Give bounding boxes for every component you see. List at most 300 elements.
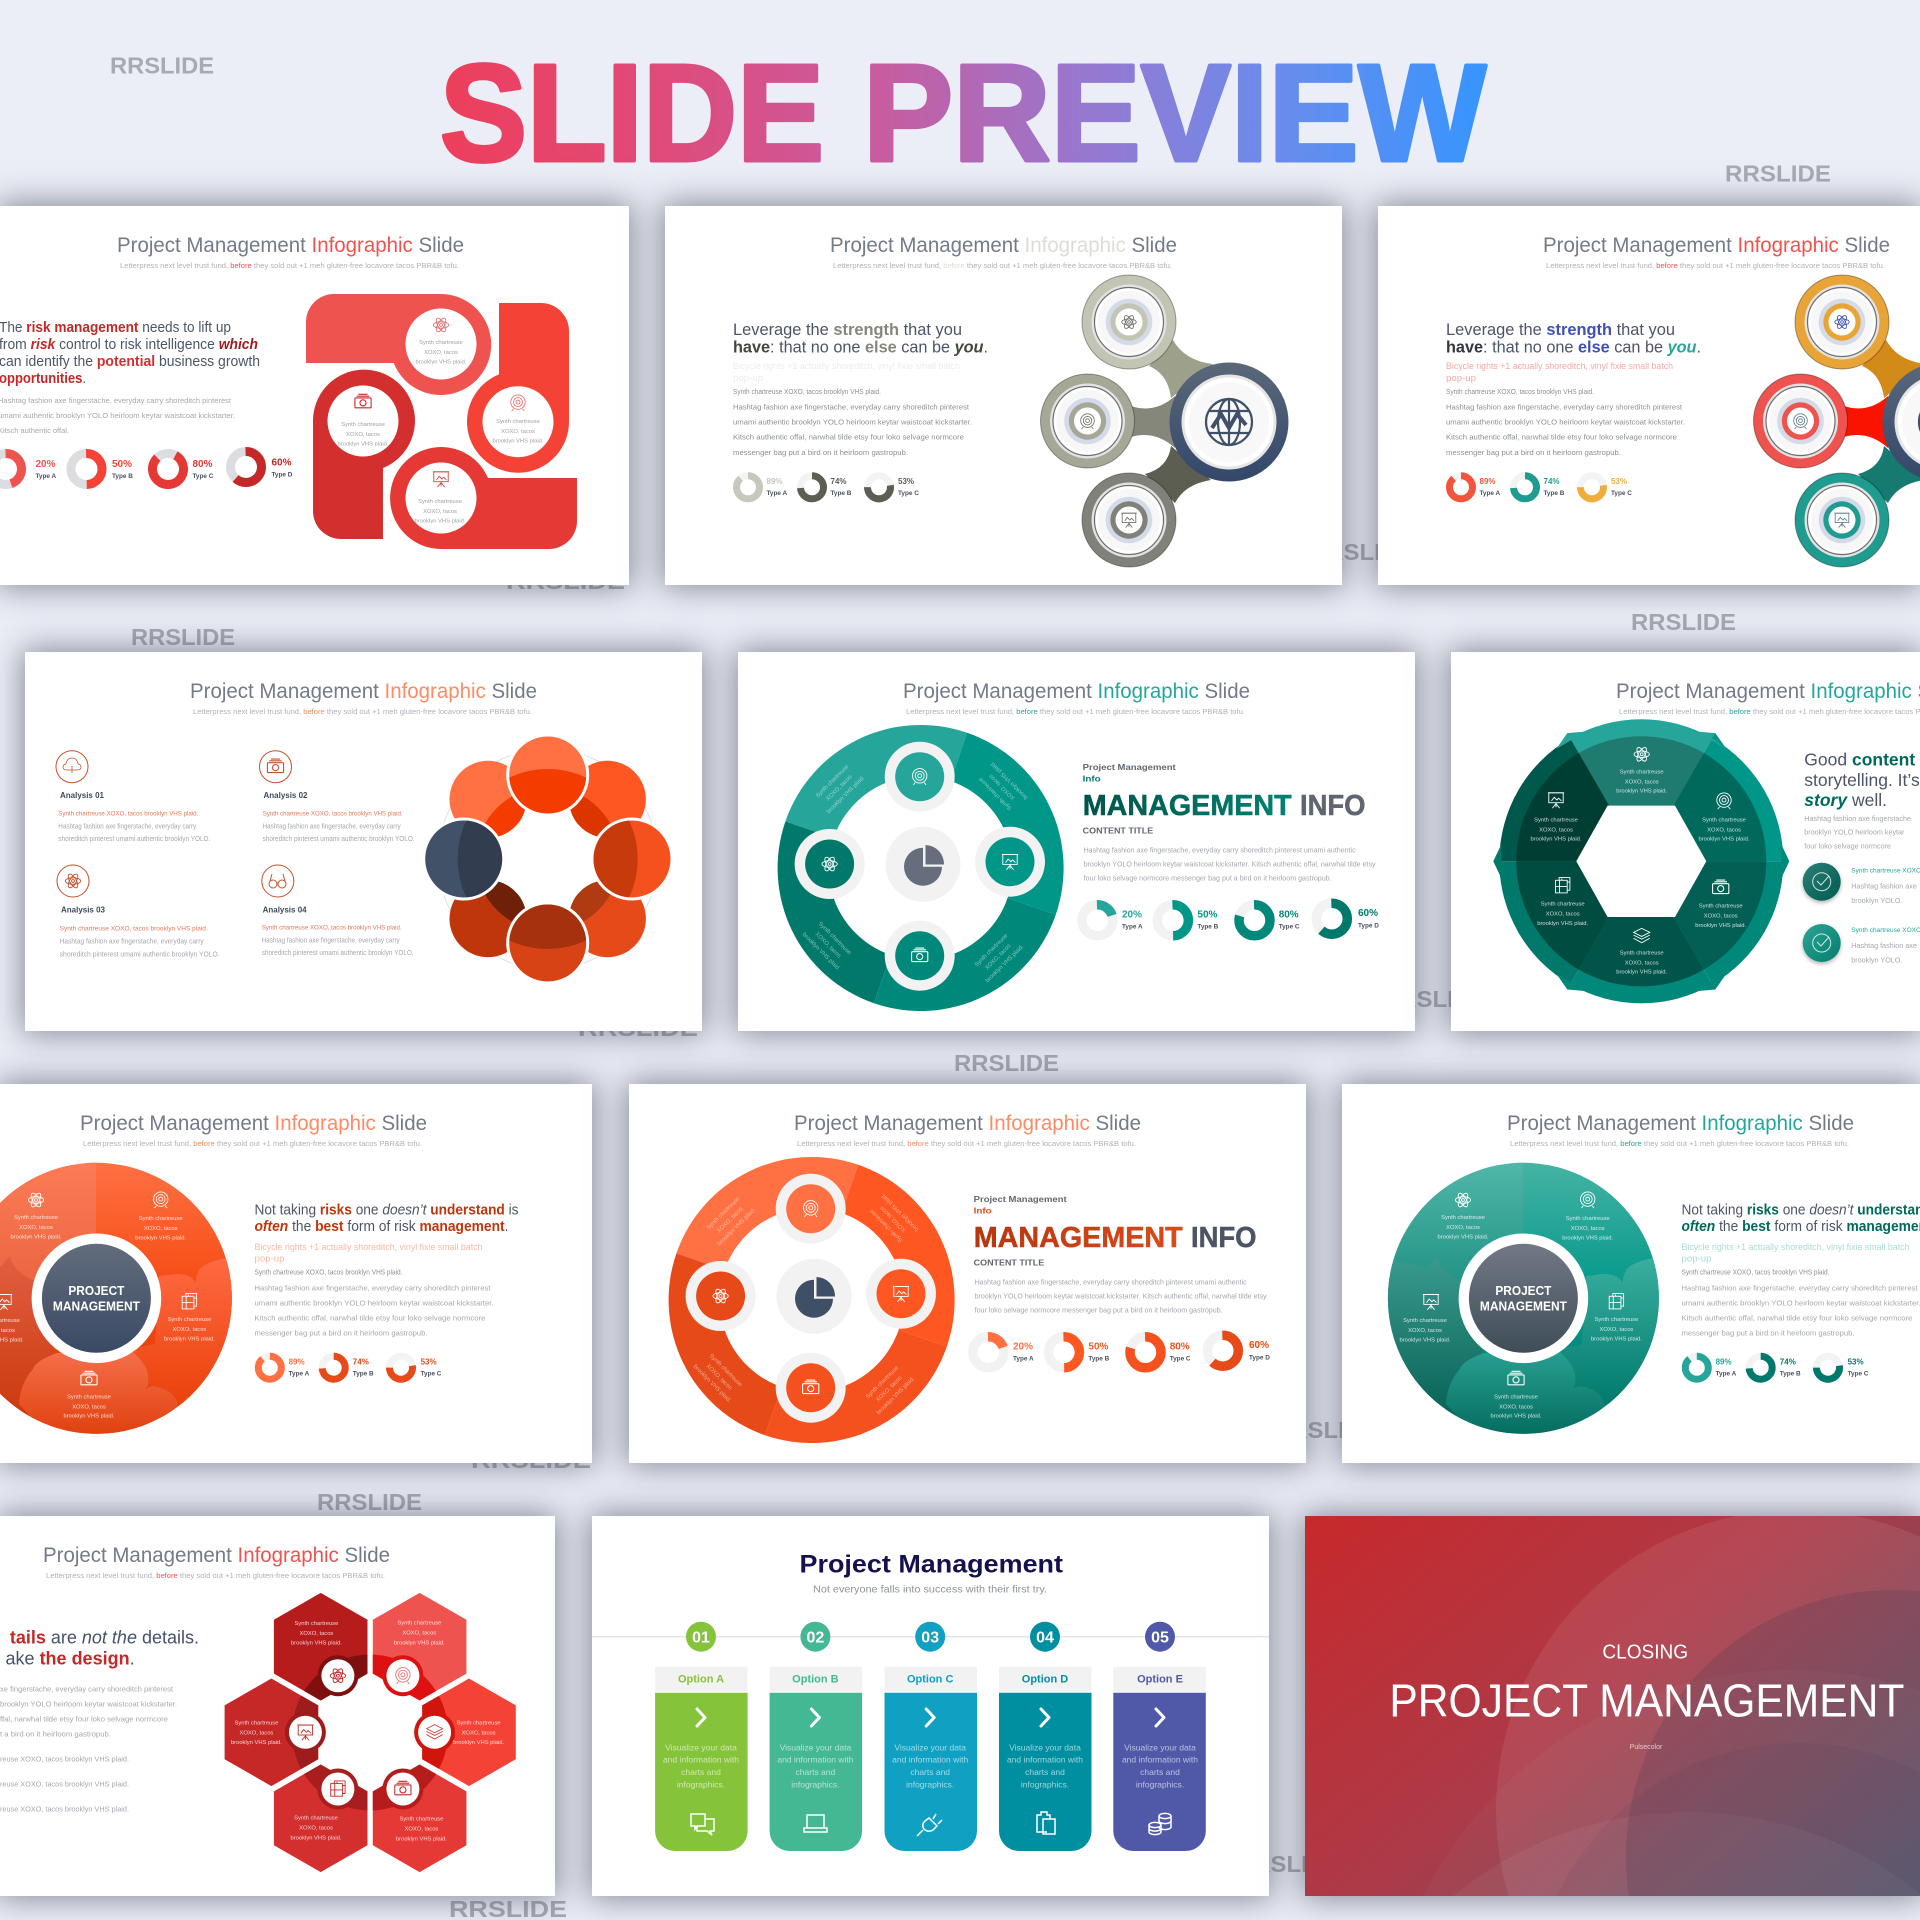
title: SLIDE [440,36,824,190]
option C column: 03 [921,1630,939,1646]
body text: messenger bag put a bird on it heirloom gastropub. [733,450,908,457]
donut labels [1480,477,1632,497]
body text: Hashtag fashion axe fingerstache, everyday carry shoreditch pinterest [733,404,969,412]
diagram: teal wheel: Synth chartreuse [1441,1215,1485,1221]
diagram: orange wheel: Synth chartreuse [67,1394,111,1400]
headline text [0,319,260,387]
title: PREVIEW [863,36,1487,190]
diagram: ring with four nodes: brooklyn VHS plaid. [826,775,866,815]
pale subtext [733,361,960,383]
pale subtext [1446,361,1673,383]
watermark: RRSLIDE [578,1015,698,1041]
option B column: and information with [777,1755,854,1765]
watermark: RRSLIDE [1382,986,1487,1012]
info heading block [974,1195,1256,1267]
body text: brooklyn YOLO heirloom keytar waistcoat kickstarter. Kitsch authentic offal, narwhal tilde etsy [975,1292,1267,1301]
donut labels: 60% [1358,908,1378,919]
diagram: hexagon ring: brooklyn VHS plaid. [1531,837,1582,843]
check item two: Synth chartreuse XOXO [1851,927,1920,934]
option E column [1113,1622,1206,1851]
diagram: four interlocking shapes: Synth chartreuse [418,499,462,505]
body text: reuse XOXO, tacos brooklyn VHS plaid. [0,1755,129,1764]
diagram: six hexagons: brooklyn VHS plaid. [394,1640,445,1646]
subheading: Letterpress next level trust fund, before they sold out +1 meh gluten-free locavore tacos PBR&B tofu. [1546,261,1885,270]
diagram: teal wheel: brooklyn VHS plaid. [1491,1414,1542,1420]
option B column: Option B [792,1673,839,1685]
donut labels: Type D [1358,922,1379,929]
diagram: six hexagons: XOXO, tacos [404,1827,438,1833]
option E column: charts and [1140,1767,1180,1777]
panel: five options slide [592,1516,1269,1896]
watermark: RRSLIDE [110,52,214,78]
body text: Synth chartreuse XOXO, tacos brooklyn VHS plaid. [733,389,881,396]
diagram: teal wheel: PROJECT [1495,1284,1552,1298]
diagram: ring with four nodes: XOXO, tacos [814,931,842,960]
diagram: hexagon ring: XOXO, tacos [1546,911,1580,917]
block: analysis 02: Analysis 02 [264,791,308,800]
option C column: charts and [910,1767,950,1777]
diagram: teal wheel: XOXO, tacos [1446,1225,1480,1231]
donut labels: Type B [112,473,133,480]
donut charts [258,1354,414,1381]
check item two [1803,924,1920,965]
headline text [1804,750,1920,810]
diagram: circle flower [424,735,672,983]
body text: t a bird on it heirloom gastropub. [0,1730,111,1739]
donut labels: Type A [766,490,787,497]
headline text [733,321,988,356]
donut labels: Type C [1611,490,1632,497]
body text: umami authentic brooklyn YOLO heirloom keytar waistcoat kickstarter. [254,1298,494,1307]
donut labels: 89% [1480,477,1496,486]
pale subtext: Bicycle rights +1 actually shoreditch, vinyl fixie small batch [733,361,960,371]
diagram: orange wheel: brooklyn VHS plaid. [135,1235,187,1241]
option A column: and information with [663,1755,739,1765]
option B column: charts and [796,1767,836,1777]
donut charts [1082,903,1347,936]
panel: hexagon details slide [0,1516,555,1896]
body text: messenger bag put a bird on it heirloom gastropub. [1446,450,1621,457]
info heading block: Project Management [974,1195,1067,1204]
subheading: Letterpress next level trust fund, before they sold out +1 meh gluten-free locavore tacos PBR&B tofu. [833,261,1172,270]
diagram: hexagon ring: brooklyn VHS plaid. [1616,970,1668,976]
diagram: ring with four nodes: Synth chartreuse [974,933,1009,968]
diagram: ring with four nodes: XOXO, tacos [825,774,854,802]
block: analysis 02: Hashtag fashion axe fingerstache, everyday carry [263,822,401,831]
body text: Hashtag fashion axe fingerstache, everyday carry shoreditch pinterest umami authentic [1084,846,1356,855]
panel: orange ring management info slide [629,1084,1306,1463]
body text: Hashtag fashion axe fingerstache, everyday carry shoreditch pinterest [0,396,231,405]
donut labels: Type A [289,1371,310,1378]
diagram: ring with four nodes: brooklyn VHS plaid. [692,1364,732,1404]
headline text: have: that no one else can be you. [1446,338,1701,356]
pale subtext: Bicycle rights +1 actually shoreditch, vinyl fixie small batch [1446,361,1673,371]
donut labels: 89% [289,1358,305,1367]
donut labels: Type A [1716,1371,1737,1378]
donut labels: 20% [1013,1341,1033,1352]
block: analysis 03: Analysis 03 [61,905,106,914]
diagram: six hexagons: XOXO, tacos [299,1631,333,1637]
body text [1084,846,1376,883]
diagram: orange wheel: Synth chartreuse [139,1216,183,1222]
block: analysis 03 [57,865,220,958]
headline text: tails are not the details. [10,1627,199,1647]
diagram: orange wheel: XOXO, tacos [72,1404,106,1410]
option A column: 01 [692,1630,710,1646]
body text: reuse XOXO, tacos brooklyn VHS plaid. [0,1780,129,1789]
block: analysis 04 [262,865,414,957]
panel: hexagon ring content slide [1451,652,1920,1031]
diagram: ring with four nodes: Synth chartreuse [706,1196,741,1231]
heading: Project Management Infographic Slide [117,234,464,257]
donut labels: 50% [1088,1341,1109,1352]
body text: reuse XOXO, tacos brooklyn VHS plaid. [0,1805,129,1814]
subheading: Not everyone falls into success with their first try. [813,1584,1047,1595]
donut charts [0,448,262,490]
info heading block: Info [1083,774,1101,783]
donut labels: 20% [36,459,56,470]
diagram: teal wheel: brooklyn VHS plaid. [1438,1234,1489,1240]
watermark: RRSLIDE [1236,1851,1341,1877]
diagram: four interlocking shapes: brooklyn VHS plaid. [416,360,467,366]
diagram: hexagon ring: brooklyn VHS plaid. [1616,789,1668,795]
donut labels: Type A [1013,1356,1034,1363]
info heading block [1083,763,1366,835]
headline text: ake the design. [6,1648,135,1668]
pale subtext: pop-up [254,1254,284,1264]
option A column [655,1622,748,1851]
watermark: RRSLIDE [1725,160,1831,186]
panel: analysis flower slide [25,652,702,1031]
diagram: orange wheel: MANAGEMENT [53,1300,140,1314]
donut labels [766,477,919,497]
option B column: Visualize your data [780,1743,852,1753]
donut labels: Type C [1170,1356,1191,1363]
donut labels: 53% [421,1358,437,1367]
body text: Kitsch authentic offal, narwhal tilde etsy four loko selvage normcore [1682,1314,1912,1323]
diagram: four interlocking shapes: brooklyn VHS plaid. [338,442,389,448]
body text: messenger bag put a bird on it heirloom gastropub. [254,1329,428,1338]
donut charts [1450,474,1605,501]
body text: umami authentic brooklyn YOLO heirloom keytar waistcoat kickstarter. [1446,420,1685,426]
diagram: hexagon ring: XOXO, tacos [1707,827,1741,833]
donut labels: Type B [1197,924,1219,931]
body text: four loko selvage normcore messenger bag put a bird on it heirloom gastropub. [975,1306,1223,1315]
info heading block: CONTENT TITLE [1083,825,1154,835]
heading: Project Management Infographic Slide [794,1112,1141,1135]
body text: brooklyn YOLO heirloom keytar waistcoat kickstarter. [0,1700,177,1709]
info heading block: Project Management [1083,763,1176,772]
diagram: teal wheel: Synth chartreuse [1594,1317,1638,1323]
body text [1682,1269,1920,1338]
diagram: hexagon ring: Synth chartreuse [1620,950,1664,956]
diagram: spinner [1040,275,1288,567]
donut labels: 74% [1780,1358,1796,1367]
closing subtitle: Pulsecolor [1630,1744,1663,1751]
donut labels: Type A [1480,490,1500,497]
diagram: hexagon ring [1493,719,1789,1003]
diagram: ring with four nodes: Synth chartreuse [815,764,850,799]
diagram: orange wheel: Synth chartreuse [14,1215,58,1221]
diagram: four interlocking shapes: XOXO, tacos [346,432,380,438]
body text: messenger bag put a bird on it heirloom gastropub. [1682,1329,1854,1338]
option A column: charts and [681,1767,721,1777]
headline text: Not taking risks one doesn’t understand is [254,1201,518,1218]
donut labels: 74% [353,1358,369,1367]
watermark: RRSLIDE [954,1050,1059,1076]
option C column: Option C [907,1673,953,1685]
block: analysis 01: Analysis 01 [60,791,105,800]
pale subtext: pop-up [733,373,763,383]
diagram: ring with four nodes [778,725,1064,1011]
diagram: hexagon ring: Synth chartreuse [1702,817,1746,823]
block: analysis 03: Hashtag fashion axe fingerstache, everyday carry [60,936,204,945]
headline text [6,1627,199,1668]
body text [733,389,972,457]
watermark: RRSLIDE [1309,539,1414,565]
diagram: orange wheel: brooklyn VHS plaid. [11,1234,62,1240]
diagram: six hexagons: brooklyn VHS plaid. [291,1835,342,1841]
body text: Kitsch authentic offal, narwhal tilde etsy four loko selvage normcore [1446,434,1677,442]
block: analysis 01: shoreditch pinterest umami authentic brooklyn YOLO. [58,834,210,843]
option A column: infographics. [677,1779,725,1789]
block: analysis 03: Synth chartreuse XOXO, tacos brooklyn VHS plaid. [60,925,208,932]
background gradient and circles [1305,1510,1920,1920]
diagram: orange wheel: PROJECT [68,1284,125,1298]
diagram: four interlocking shapes: brooklyn VHS plaid. [493,438,544,444]
donut labels: 60% [1249,1340,1269,1351]
info heading block: MANAGEMENT [974,1222,1183,1254]
donut labels: 53% [1611,477,1627,486]
donut labels: 89% [766,477,783,486]
diagram: four interlocking shapes: Synth chartreuse [496,419,540,425]
diagram: six hexagons: Synth chartreuse [234,1720,278,1726]
diagram: spinner [1754,275,1920,567]
donut labels: Type C [898,490,919,497]
diagram: hexagon ring: XOXO, tacos [1625,779,1659,785]
diagram: six hexagons: Synth chartreuse [294,1621,338,1627]
diagram: ring with four nodes: brooklyn VHS plaid. [801,932,841,972]
diagram: hexagon ring: Synth chartreuse [1541,901,1585,907]
body text: xe fingerstache, everyday carry shoreditch pinterest [0,1685,173,1694]
watermark: RRSLIDE [1631,609,1736,635]
panel: orange wheel risks slide [0,1084,592,1463]
option A column: Visualize your data [665,1743,737,1753]
option C column [884,1622,977,1851]
option D column: Option D [1022,1673,1068,1685]
option D column: charts and [1025,1767,1065,1777]
donut labels: Type B [1780,1371,1801,1378]
headline text: from risk control to risk intelligence which [0,336,258,353]
watermark: RRSLIDE [131,624,235,650]
pale subtext: Bicycle rights +1 actually shoreditch, vinyl fixie small batch [1682,1242,1910,1252]
diagram: hexagon ring: XOXO, tacos [1704,914,1738,920]
donut labels: Type B [1088,1356,1110,1363]
panel: risk management slide [0,206,629,585]
diagram: ring with four nodes: XOXO, tacos [988,772,1016,801]
pale subtext: Bicycle rights +1 actually shoreditch, vinyl fixie small batch [254,1242,482,1252]
diagram: teal wheel: XOXO, tacos [1599,1327,1633,1333]
body text: umami authentic brooklyn YOLO heirloom keytar waistcoat kickstarter. [1682,1298,1920,1307]
diagram: six hexagons: XOXO, tacos [462,1730,496,1736]
closing label: CLOSING [1602,1641,1688,1663]
body text: Synth chartreuse XOXO, tacos brooklyn VHS plaid. [1682,1269,1830,1276]
diagram: teal wheel: brooklyn VHS plaid. [1562,1235,1614,1241]
body text [1446,389,1685,457]
diagram: ring with four nodes: brooklyn VHS plaid. [717,1207,757,1247]
heading: Project Management [800,1551,1064,1579]
headline text: The risk management needs to lift up [0,319,231,336]
diagram: ring with four nodes: Synth chartreuse [708,1353,743,1388]
donut labels: 80% [192,459,213,470]
headline text [1682,1201,1920,1235]
diagram: orange wheel: brooklyn VHS plaid. [64,1414,115,1420]
pale subtext [254,1242,482,1264]
subheading: Letterpress next level trust fund, before they sold out +1 meh gluten-free locavore tacos PBR&B tofu. [1510,1139,1849,1148]
block: analysis 02: Synth chartreuse XOXO, tacos brooklyn VHS plaid. [263,811,403,818]
diagram: six hexagons: XOXO, tacos [402,1631,436,1637]
diagram: ring with four nodes: brooklyn VHS plaid. [989,760,1029,800]
donut labels: Type B [1544,490,1565,497]
donut charts [1685,1354,1841,1381]
donut charts [973,1335,1238,1368]
diagram: ring with four nodes: Synth chartreuse [817,921,852,956]
option D column: and information with [1007,1755,1083,1765]
diagram: ring with four nodes [669,1157,955,1443]
title [440,36,1487,190]
donut labels: 53% [1848,1358,1864,1367]
body text: Synth chartreuse XOXO, tacos brooklyn VHS plaid. [254,1269,403,1276]
watermark: RRSLIDE [471,1447,591,1473]
body text: Hashtag fashion axe fingerstache [1804,814,1911,823]
headline text: often the best form of risk management. [254,1218,508,1235]
diagram: ring with four nodes: XOXO, tacos [879,1204,907,1233]
diagram: hexagon ring: Synth chartreuse [1620,769,1664,775]
headline text: story well. [1804,790,1887,810]
donut labels: 74% [830,477,847,486]
diagram: six hexagons: brooklyn VHS plaid. [396,1836,447,1842]
headline text [1446,321,1701,356]
donut labels [289,1358,442,1378]
option B column: 02 [807,1630,824,1646]
heading: Project Management Infographic Slide [830,234,1177,257]
diagram: four interlocking shapes: XOXO, tacos [501,429,535,435]
heading: Project Management Infographic Slide [903,680,1250,703]
heading: Project Management Infographic Slide [1507,1112,1854,1135]
diagram: six hexagons [225,1593,516,1872]
diagram: teal wheel: Synth chartreuse [1566,1216,1610,1222]
diagram: six hexagons: Synth chartreuse [294,1816,338,1822]
diagram: hexagon ring: Synth chartreuse [1534,817,1578,823]
diagram: six hexagons: Synth chartreuse [457,1720,501,1726]
info heading block: INFO [1191,1222,1256,1254]
check item one [1803,863,1920,905]
body text: four loko selvage normcore [1804,842,1891,851]
diagram: four interlocking shapes: XOXO, tacos [424,350,458,356]
body text: brooklyn YOLO heirloom keytar [1804,828,1905,837]
diagram: teal wheel: XOXO, tacos [1499,1404,1533,1410]
diagram: orange wheel: brooklyn VHS plaid. [164,1336,215,1342]
option D column [999,1622,1092,1851]
diagram: orange wheel: XOXO, tacos [144,1226,178,1232]
panel: teal ring management info slide [738,652,1415,1031]
diagram: ring with four nodes: XOXO, tacos [984,943,1013,971]
panel: teal wheel risks slide [1342,1084,1920,1463]
donut labels: 80% [1279,909,1299,920]
subheading: Letterpress next level trust fund, before they sold out +1 meh gluten-free locavore tacos PBR&B tofu. [193,707,532,716]
body text [975,1278,1267,1315]
subheading: Letterpress next level trust fund, before they sold out +1 meh gluten-free locavore tacos PBR&B tofu. [46,1571,385,1580]
donut labels: 50% [112,459,132,470]
donut labels: Type C [1279,924,1300,931]
heading: Project Management Infographic Slide [190,680,537,703]
headline text: opportunities. [0,370,86,387]
body text [0,1685,177,1814]
block: analysis 03: shoreditch pinterest umami authentic brooklyn YOLO. [60,949,220,958]
option A column: Option A [678,1673,724,1685]
diagram: orange wheel: XOXO, tacos [19,1225,53,1231]
watermark: RRSLIDE [317,1489,422,1515]
donut labels: Type C [1848,1371,1869,1378]
block: analysis 04: Synth chartreuse XOXO, tacos brooklyn VHS plaid. [262,925,402,932]
block: analysis 04: Analysis 04 [263,905,307,914]
info heading block: MANAGEMENT [1083,790,1292,822]
diagram: teal wheel: Synth chartreuse [1403,1318,1447,1324]
body text [254,1269,494,1338]
donut charts [736,474,892,501]
check item two: brooklyn YOLO. [1851,956,1902,965]
diagram: ring with four nodes: XOXO, tacos [875,1375,904,1403]
diagram: six hexagons: XOXO, tacos [239,1730,273,1736]
donut labels: Type A [36,473,56,480]
diagram: teal wheel [1388,1162,1659,1434]
body text: Hashtag fashion axe fingerstache, everyday carry shoreditch pinterest [1682,1284,1918,1293]
headline text: Leverage the strength that you [1446,321,1675,339]
headline text: can identify the potential business growth [0,353,260,370]
option B column: infographics. [791,1779,840,1789]
option D column: infographics. [1021,1779,1069,1789]
body text: Hashtag fashion axe fingerstache, everyday carry shoreditch pinterest [1446,404,1682,412]
option E column: Option E [1137,1673,1183,1685]
option C column: and information with [892,1755,969,1765]
donut labels: Type C [421,1371,442,1378]
check item one: brooklyn YOLO. [1851,896,1902,905]
donut labels [1122,908,1379,931]
pale subtext: pop-up [1682,1254,1712,1264]
body text: Synth chartreuse XOXO, tacos brooklyn VHS plaid. [1446,389,1594,396]
body text [1804,814,1911,851]
donut labels: Type D [272,472,293,478]
donut labels: Type B [353,1371,374,1378]
option C column: infographics. [906,1779,954,1789]
diagram: orange wheel [0,1162,232,1434]
diagram: hexagon ring: brooklyn VHS plaid. [1695,923,1747,929]
body text: Kitsch authentic offal. [0,426,69,435]
pale subtext [1682,1242,1910,1264]
diagram: ring with four nodes: Synth chartreuse [865,1365,900,1400]
diagram: teal wheel: MANAGEMENT [1480,1300,1567,1314]
subheading: Letterpress next level trust fund, before they sold out +1 meh gluten-free locavore tacos PBR&B tofu. [120,261,459,270]
diagram: teal wheel: Synth chartreuse [1494,1394,1538,1400]
donut labels [1716,1358,1869,1378]
diagram: ring with four nodes: XOXO, tacos [705,1363,733,1392]
headline text: Leverage the strength that you [733,321,962,339]
block: analysis 04: shoreditch pinterest umami authentic brooklyn YOLO. [262,948,414,957]
body text: Hashtag fashion axe fingerstache, everyday carry shoreditch pinterest umami authentic [975,1278,1247,1287]
watermark: RRSLIDE [1273,1417,1378,1443]
donut labels: 60% [272,458,292,468]
donut labels [1013,1340,1270,1363]
